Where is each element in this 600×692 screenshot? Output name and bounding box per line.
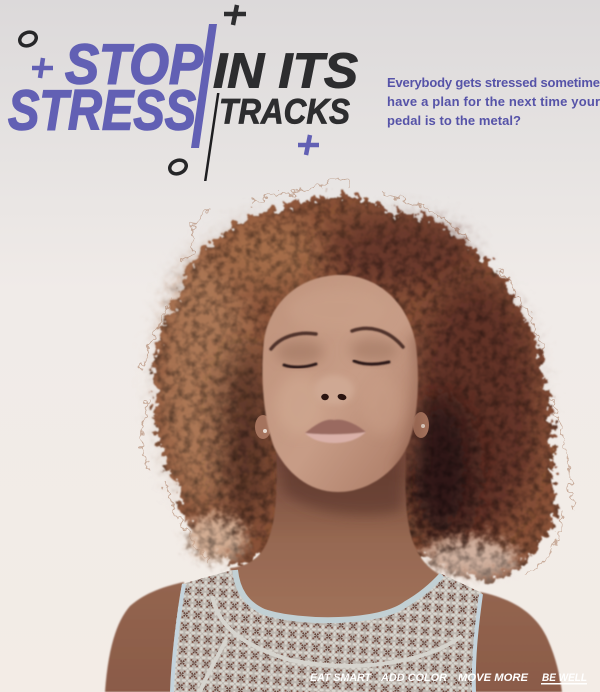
title graphic <box>8 5 358 181</box>
left shoulder <box>105 582 184 692</box>
navigation <box>310 672 587 684</box>
icon: purple plus left <box>32 58 53 78</box>
title: in its tracks: TRACKS <box>219 92 350 132</box>
title: stop stress: STRESS <box>8 78 196 142</box>
ears <box>255 412 429 439</box>
closed eyes <box>284 361 389 367</box>
icon: black plus <box>224 5 246 25</box>
woman portrait <box>105 179 572 692</box>
icon: ring top <box>18 30 38 48</box>
intro text <box>387 75 600 128</box>
hair <box>142 179 572 581</box>
title: in its tracks: IN ITS <box>213 44 358 98</box>
intro text: have a plan for the next time your <box>387 94 600 109</box>
navigation: ADD COLOR <box>380 672 447 684</box>
title: in its tracks <box>213 44 358 132</box>
neck <box>230 450 446 630</box>
navigation: EAT SMART <box>310 672 372 684</box>
navigation: MOVE MORE <box>458 672 529 684</box>
intro text: Everybody gets stressed sometime <box>387 75 600 90</box>
intro text: pedal is to the metal? <box>387 113 521 128</box>
navigation: BE WELL <box>542 672 587 684</box>
face shading <box>276 288 425 470</box>
purple slash <box>191 24 217 148</box>
icon: purple plus right <box>298 135 319 155</box>
title: stop stress: STOP <box>65 32 204 96</box>
eyebrows <box>271 328 403 349</box>
neck shadow <box>280 455 404 515</box>
nose <box>314 375 354 405</box>
right shoulder <box>470 592 562 692</box>
black slash <box>204 93 220 181</box>
lips <box>305 420 366 443</box>
lace top <box>171 570 482 692</box>
icon: ring bottom <box>168 158 188 176</box>
face <box>262 275 418 492</box>
title: stop stress <box>8 32 204 142</box>
